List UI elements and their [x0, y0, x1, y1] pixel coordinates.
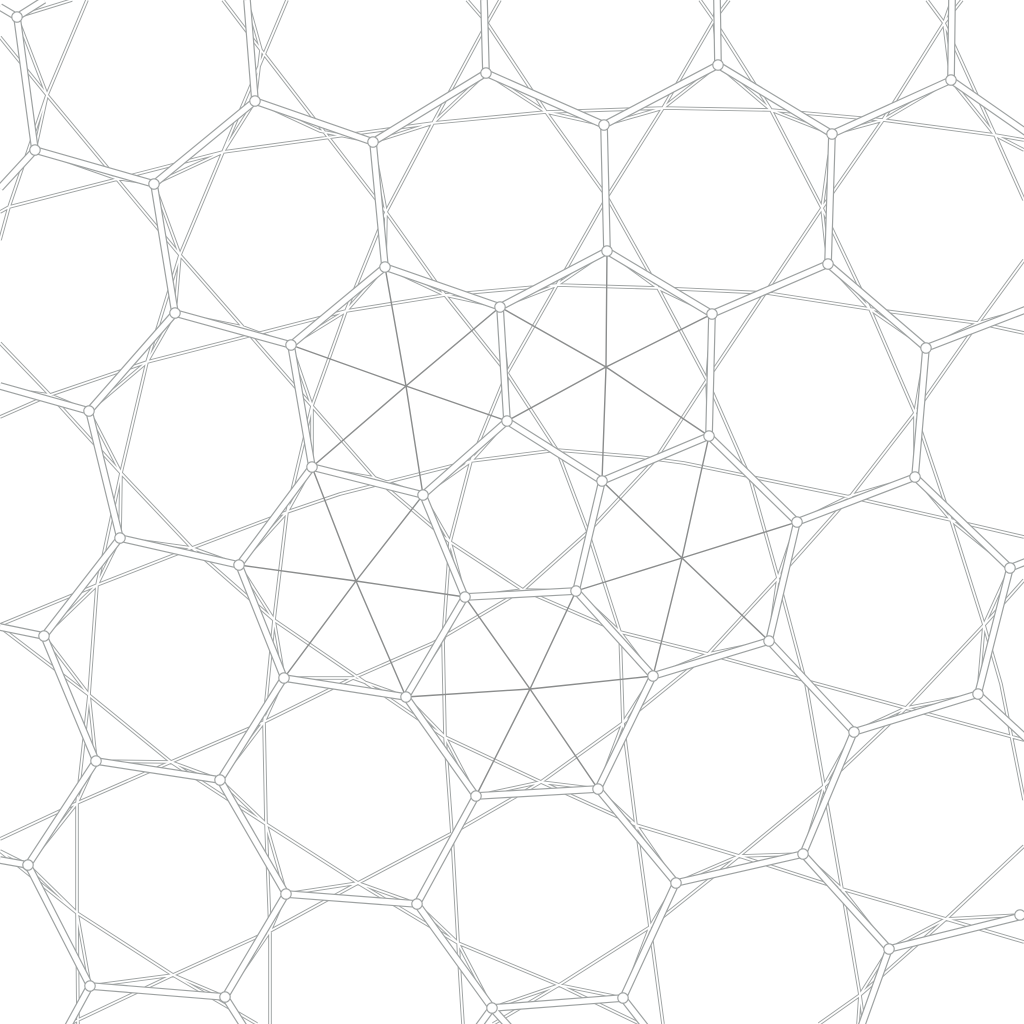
central dark hub lines	[239, 251, 797, 796]
